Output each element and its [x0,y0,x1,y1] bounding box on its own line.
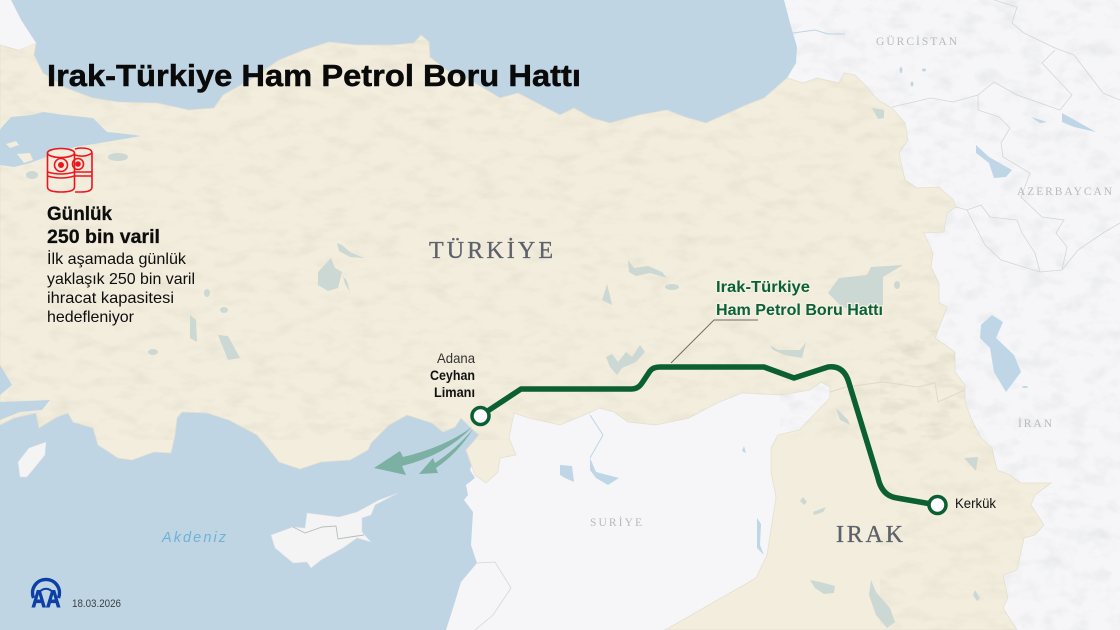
lakes: Türkiye and Irak [26,108,980,628]
country label: Suriye: SURİYE [590,515,642,529]
heading: daily volume [47,204,160,248]
pipeline route [480,367,937,505]
pipeline label: Irak-Türkiye [716,279,810,296]
icon: oil barrels [48,148,92,192]
city label: Adana Ceyhan Limanı: Limanı [434,385,475,400]
callout: daily capacity [47,204,195,326]
rivers [590,30,845,458]
pipeline leader line [671,320,758,363]
island: Cyprus [271,493,398,568]
marker: Kerkük [929,496,946,514]
body text: capacity description: İlk aşamada günlük [47,249,187,268]
country label: İran: İRAN [1018,416,1053,430]
Sea of Marmara [0,112,141,167]
terrain shading: Türkiye and Irak [2,40,991,583]
city label: Adana Ceyhan Limanı [430,350,475,400]
pipeline label [716,279,883,319]
country label: Gürcistan: GÜRCİSTAN [876,34,958,48]
Bulgaria corner [0,0,36,50]
pipeline label: Ham Petrol Boru Hattı [716,302,883,319]
country label: Türkiye: TÜRKİYE [429,238,553,264]
Marmara islands [6,141,33,163]
arrows: export routes [374,427,473,475]
body text: capacity description: ihracat kapasitesi [47,290,174,307]
city label: Adana Ceyhan Limanı: Adana [437,350,475,366]
body text: capacity description: hedefleniyor [47,309,135,326]
country label: Azerbaycan: AZERBAYCAN [1017,186,1113,198]
city label: Adana Ceyhan Limanı: Ceyhan [430,368,475,383]
country borders [475,0,1120,630]
logo: AA: AA [32,586,60,613]
body text: capacity description [47,249,195,326]
city label: Kerkük: Kerkük [955,495,997,511]
logo: AA [32,579,60,613]
heading: daily volume: Günlük [47,204,112,225]
terrain shading: neighbouring countries [780,0,1120,630]
marker: Ceyhan [472,408,489,424]
lakes: neighbouring countries [560,67,1096,555]
Black Sea [11,0,797,123]
island: Rhodes [18,442,46,477]
Irak-Türkiye border [830,382,965,402]
title: Irak-Türkiye Ham Petrol Boru Hattı [47,58,581,93]
date: 18.03.2026 [72,598,121,610]
heading: daily volume: 250 bin varil [47,227,160,248]
body text: capacity description: yaklaşık 250 bin varil [47,271,195,288]
Aegean inlets [0,365,50,420]
sea label: Akdeniz: Akdeniz [161,530,227,546]
country label: Irak: IRAK [836,522,904,548]
Mediterranean Sea [0,360,490,630]
